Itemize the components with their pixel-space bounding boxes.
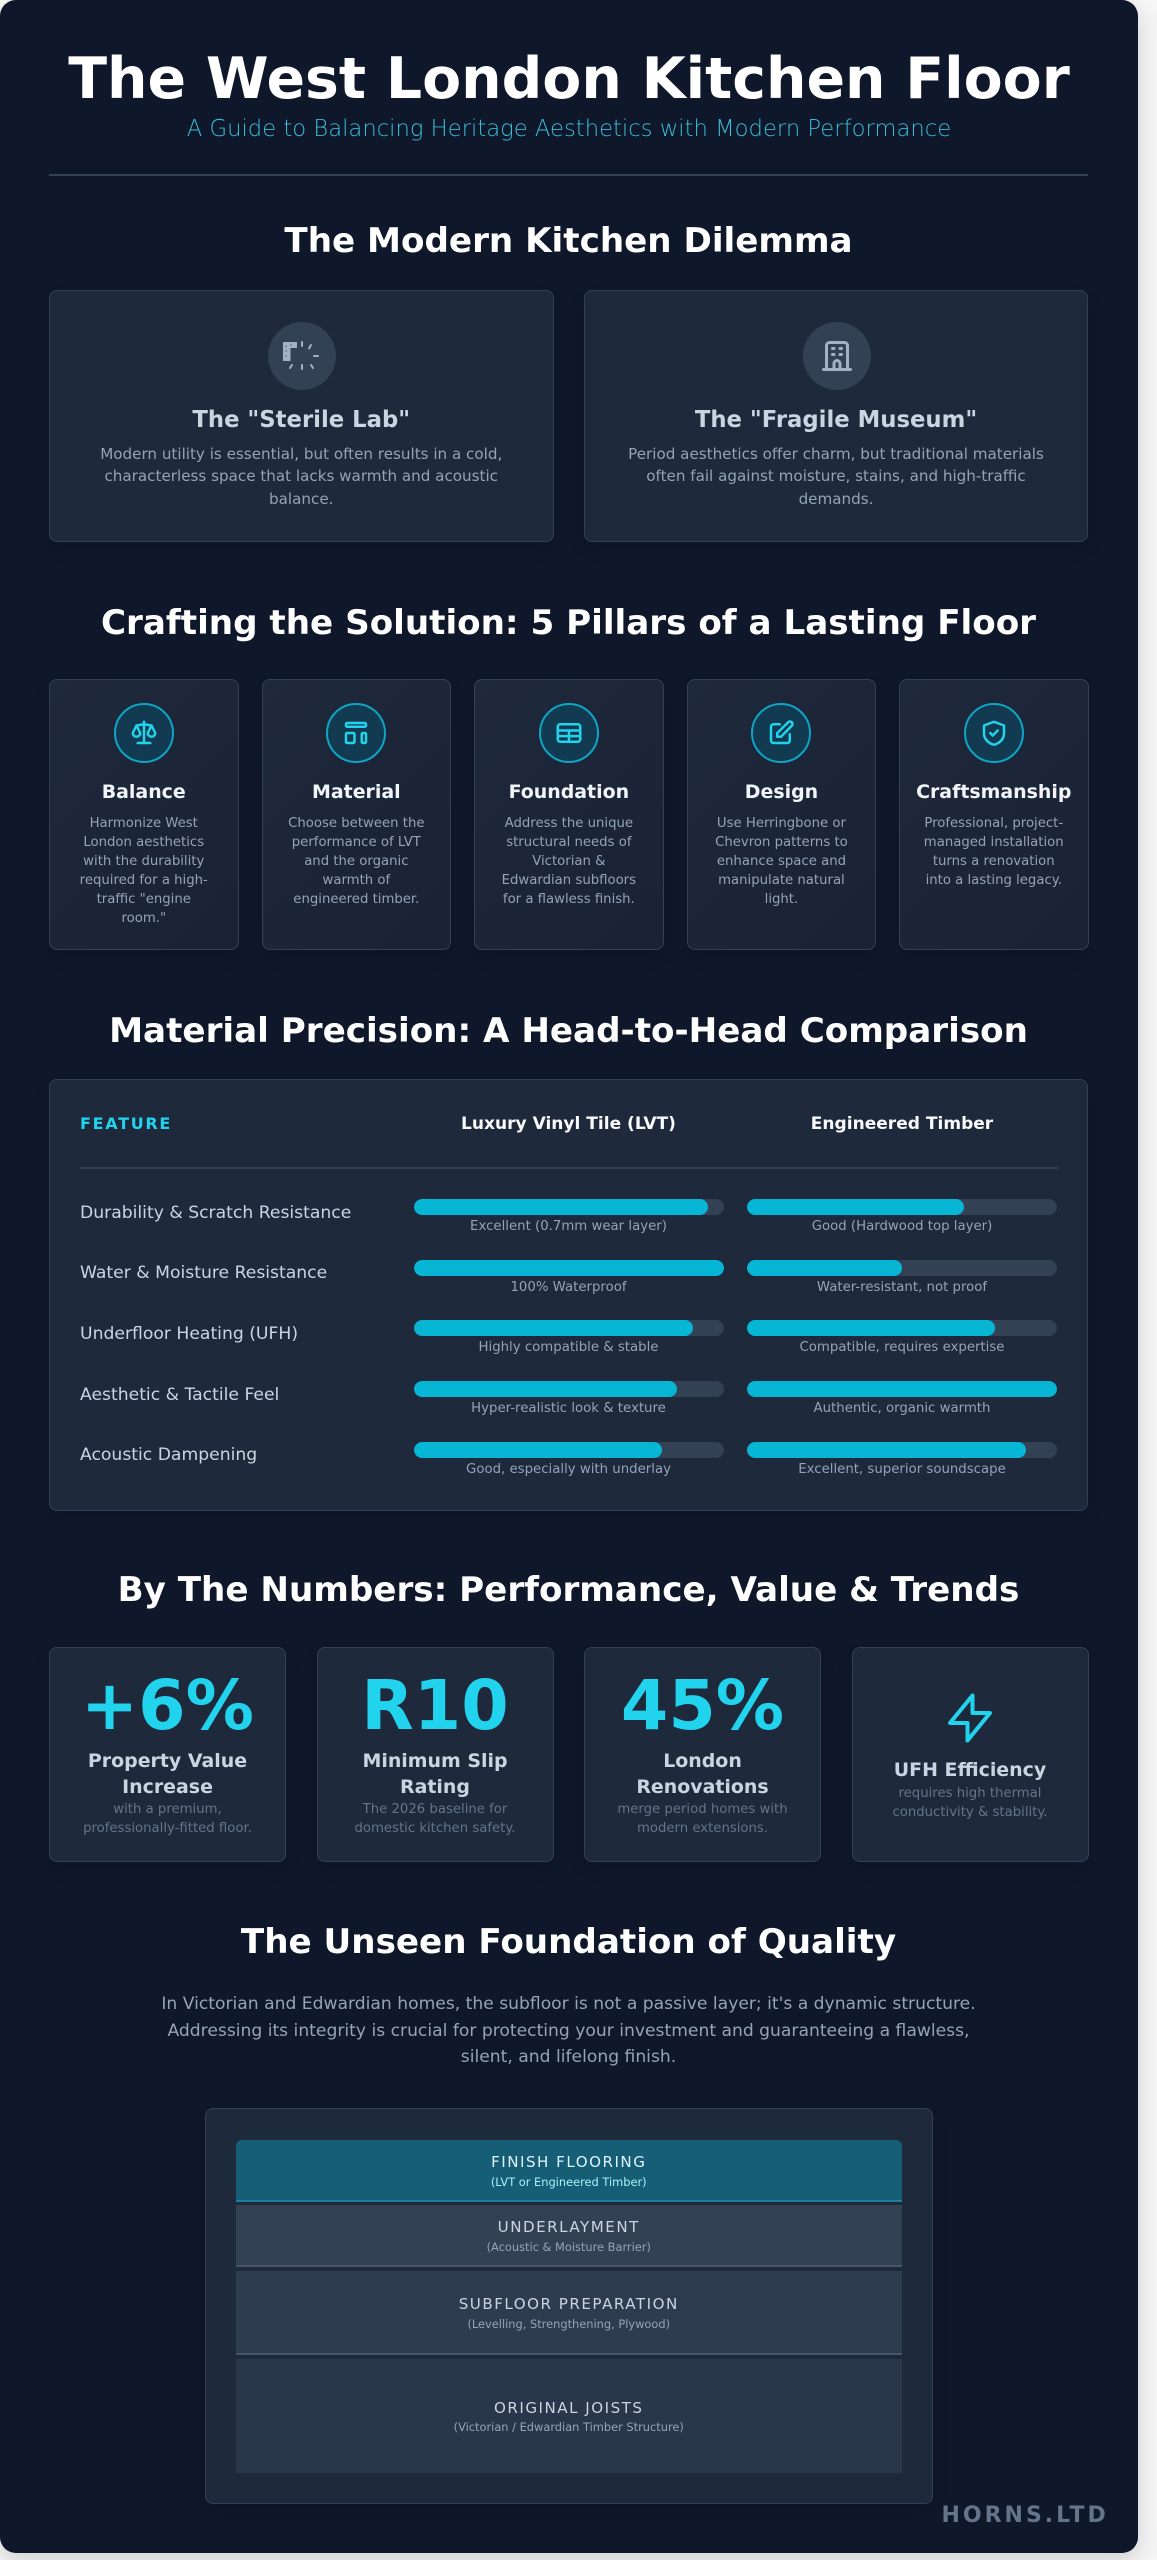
timber bar [747,1199,1057,1215]
pillar title: Balance [102,781,186,803]
pillar text: for a flawless finish. [503,892,635,906]
stat label [362,1750,508,1798]
title: The West London Kitchen Floor [68,46,1070,112]
stat note: requires high thermal [898,1786,1042,1800]
icon: building [802,322,870,390]
lvt value: Hyper-realistic look & texture [471,1401,666,1416]
lvt bar [414,1199,724,1215]
pillar: craftsmanship [899,679,1088,950]
pillar title: Material [312,781,401,803]
card text: demands. [799,490,873,508]
lvt value: 100% Waterproof [510,1280,627,1295]
card text: balance. [269,490,333,508]
timber bar [747,1381,1057,1397]
row: aesthetic [80,1381,1057,1416]
stat note: merge period homes with [617,1802,788,1817]
pillar text [715,816,848,906]
row: acoustic [80,1442,1057,1477]
lvt bar [414,1320,724,1336]
card title: The "Fragile Museum" [695,407,977,433]
timber value: Good (Hardwood top layer) [812,1219,992,1234]
layer: finish flooring [236,2140,902,2202]
stat label [88,1750,247,1798]
heading: dilemma: The Modern Kitchen Dilemma [284,221,853,261]
pillar text: warmth of [323,872,390,888]
lvt bar [414,1442,724,1458]
feature label: Water & Moisture Resistance [80,1263,327,1283]
pillar text [502,816,636,906]
row: heating [80,1320,1057,1355]
layer name: UNDERLAYMENT [498,2218,640,2236]
stat note: domestic kitchen safety. [354,1821,516,1836]
icon: pencil square [751,703,811,763]
pillar title: Foundation [509,781,629,803]
pillar text: Address the unique [505,816,633,830]
layer: original joists [236,2359,902,2473]
pillar text: into a lasting legacy. [926,872,1062,888]
pillar: design [687,679,876,950]
stat: property value [49,1647,286,1862]
pillar text: traffic "engine [97,892,191,906]
stat label [636,1750,769,1798]
stat label: London [663,1750,742,1772]
layer name: ORIGINAL JOISTS [494,2398,643,2416]
stat note: professionally-fitted floor. [83,1821,252,1836]
heading: numbers: By The Numbers: Performance, Value & Trends [118,1570,1019,1610]
panel: sterile lab [49,290,554,542]
stat label: Minimum Slip [362,1750,508,1772]
intro paragraph: silent, and lifelong finish. [461,2047,676,2067]
card text: characterless space that lacks warmth and acoustic [104,467,498,485]
pillar text: with the durability [83,854,204,868]
icon: shield check [964,703,1024,763]
pillar text: Harmonize West [90,816,198,830]
pillar text: Chevron patterns to [715,834,848,850]
lvt bar [414,1260,724,1276]
lvt value: Excellent (0.7mm wear layer) [470,1219,667,1234]
pillar text [924,816,1064,888]
timber value: Water-resistant, not proof [817,1280,987,1295]
pillar text: required for a high- [80,872,208,888]
heading: comparison: Material Precision: A Head-to-Head Comparison [109,1010,1028,1050]
feature label: Aesthetic & Tactile Feel [80,1384,279,1404]
heading: foundation: The Unseen Foundation of Quality [241,1922,896,1962]
stat label: Property Value [88,1750,247,1772]
layer detail: (LVT or Engineered Timber) [491,2175,647,2189]
icon: sterile lab [268,322,336,390]
stat note: with a premium, [113,1802,222,1817]
pillar text: turns a renovation [933,854,1055,868]
feature label: Acoustic Dampening [80,1445,257,1465]
stat note [892,1786,1048,1820]
brand watermark: HORNS.LTD [942,2502,1109,2528]
pillar text: Victorian & [532,854,605,868]
stat label: Renovations [636,1776,769,1798]
card title: The "Sterile Lab" [192,407,410,433]
intro paragraph: In Victorian and Edwardian homes, the subfloor is not a passive layer; it's a dynamic structure. [161,1994,976,2014]
heading: pillars: Crafting the Solution: 5 Pillars of a Lasting Floor [101,603,1036,643]
pillar: material [262,679,451,950]
feature label: Durability & Scratch Resistance [80,1202,351,1222]
pillar text: enhance space and [717,854,846,868]
stat note [617,1802,788,1836]
icon: table [539,703,599,763]
stat note [83,1802,252,1836]
intro paragraph: Addressing its integrity is crucial for protecting your investment and guaranteeing a flawless, [167,2020,970,2040]
layer detail: (Victorian / Edwardian Timber Structure) [454,2420,684,2434]
pillar text: Use Herringbone or [717,816,846,830]
lvt bar [414,1381,724,1397]
pillar: balance [49,679,238,950]
stat label: Rating [400,1776,470,1798]
stat: london renovations [584,1647,821,1862]
stat number: R10 [361,1666,509,1746]
lvt value: Good, especially with underlay [466,1462,671,1477]
subtitle: A Guide to Balancing Heritage Aesthetics with Modern Performance [187,116,951,142]
pillar text: manipulate natural [718,872,845,888]
stat number: 45% [621,1666,784,1746]
pillar: foundation [474,679,664,950]
pillar text [80,816,208,926]
feature label: Underfloor Heating (UFH) [80,1324,298,1344]
pillar text: London aesthetics [83,834,204,850]
pillar text: Choose between the [288,816,425,830]
stat label: UFH Efficiency [894,1759,1046,1781]
column header: lvt: Luxury Vinyl Tile (LVT) [461,1114,676,1134]
layer detail: (Levelling, Strengthening, Plywood) [467,2316,670,2330]
card text: often fail against moisture, stains, and high-traffic [646,467,1026,485]
stat note: conductivity & stability. [892,1804,1048,1820]
timber value: Authentic, organic warmth [814,1401,990,1416]
card text [100,445,502,508]
pillar text [288,816,425,906]
pillar text: engineered timber. [293,892,419,906]
pillar text: and the organic [304,854,408,868]
pillar text: performance of LVT [292,834,421,850]
layer name: FINISH FLOORING [491,2153,646,2171]
timber value: Excellent, superior soundscape [798,1462,1006,1477]
card text [628,445,1044,508]
pillar text: room." [121,910,166,926]
stat number: +6% [81,1666,254,1746]
pillar text: Edwardian subfloors [502,872,636,888]
icon: layout [326,703,386,763]
stat note: The 2026 baseline for [363,1802,507,1817]
card text: Modern utility is essential, but often results in a cold, [100,445,502,463]
card text: Period aesthetics offer charm, but traditional materials [628,445,1044,463]
row: durability [80,1199,1057,1234]
layer detail: (Acoustic & Moisture Barrier) [487,2240,651,2254]
layer: subfloor preparation [236,2271,902,2355]
layer name: SUBFLOOR PREPARATION [459,2295,679,2313]
pillar text: light. [765,892,798,906]
timber bar [747,1260,1057,1276]
timber bar [747,1442,1057,1458]
pillar title: Craftsmanship [916,781,1071,803]
stat: ufh efficiency [852,1647,1088,1862]
pillar text: structural needs of [506,834,631,850]
pillar text: managed installation [924,834,1064,850]
stat note [354,1802,516,1836]
timber value: Compatible, requires expertise [800,1340,1004,1355]
comparison table [49,1079,1088,1511]
stat: slip rating [316,1647,554,1862]
layer: underlayment [236,2205,902,2267]
pillar title: Design [745,781,818,803]
stat label: Increase [122,1776,213,1798]
column header: timber: Engineered Timber [811,1114,993,1134]
timber bar [747,1320,1057,1336]
pillar text: Professional, project- [924,816,1063,830]
icon: scale [114,703,174,763]
intro paragraph [161,1994,976,2067]
stat note: modern extensions. [637,1821,768,1836]
icon: bolt [948,1694,992,1742]
lvt value: Highly compatible & stable [478,1340,658,1355]
column header: feature: FEATURE [80,1114,172,1133]
floor layers diagram [205,2108,933,2504]
panel: fragile museum [584,290,1088,542]
row: water [80,1260,1057,1295]
